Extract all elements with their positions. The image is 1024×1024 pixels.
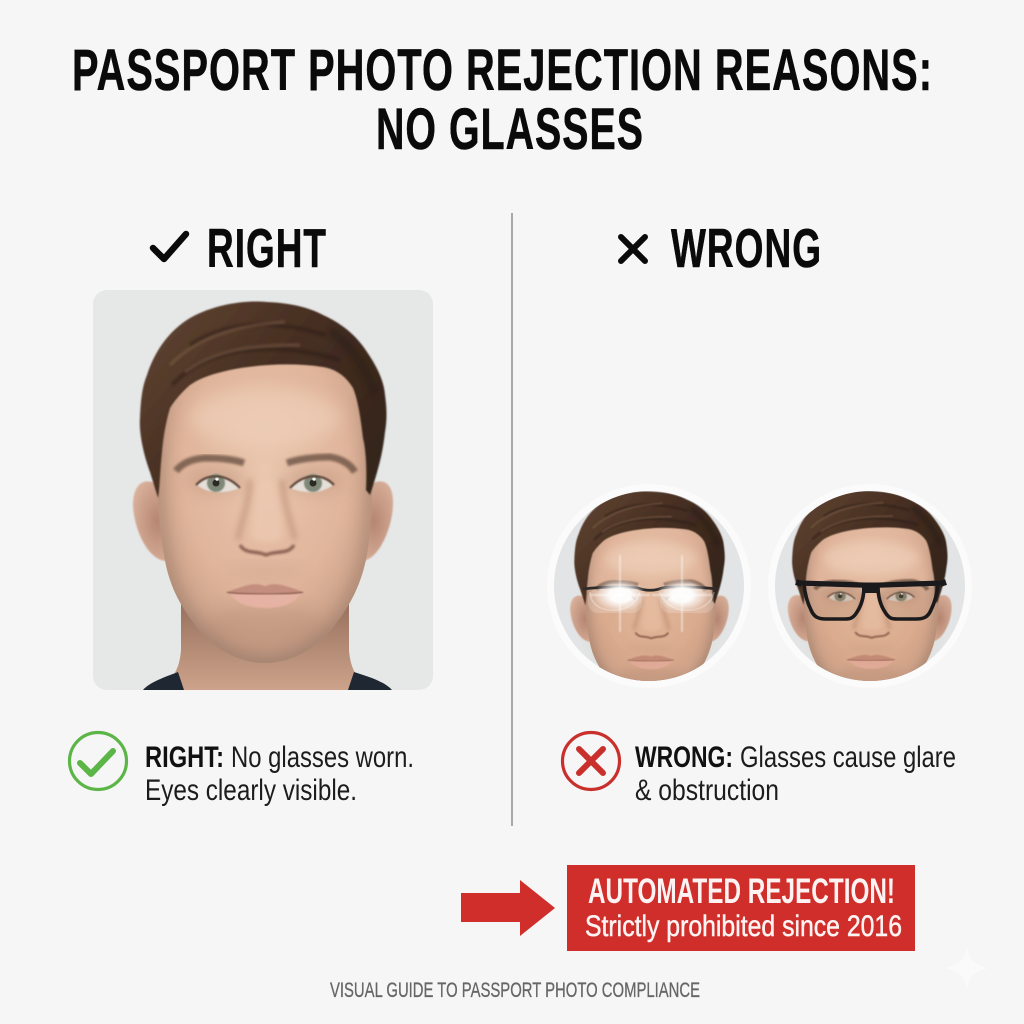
heading: right: RIGHT <box>207 217 327 279</box>
arrow pointing to callout <box>461 880 555 936</box>
caption: wrong: WRONG: <box>635 741 733 774</box>
center divider <box>511 213 513 826</box>
icon: red x circle <box>562 732 620 790</box>
decorative sparkle <box>945 946 989 990</box>
photo circle: thick frame glasses <box>775 491 965 681</box>
footer note: VISUAL GUIDE TO PASSPORT PHOTO COMPLIANCE <box>330 979 700 1002</box>
caption: right: RIGHT: <box>145 741 224 774</box>
caption: right: Eyes clearly visible. <box>145 774 357 807</box>
caption: wrong: & obstruction <box>635 774 779 807</box>
glare highlights <box>590 555 712 632</box>
callout: automated rejection <box>567 865 915 951</box>
caption: right: No glasses worn. <box>231 741 414 774</box>
icon: green check circle <box>70 732 126 790</box>
heading: wrong <box>621 217 822 279</box>
heading: wrong: WRONG <box>671 217 822 279</box>
callout: automated rejection: Strictly prohibited since 2016 <box>585 910 902 943</box>
heading: right <box>153 217 327 279</box>
title <box>72 38 933 162</box>
callout: automated rejection: AUTOMATED REJECTION! <box>588 872 895 911</box>
photo: compliant portrait without glasses <box>93 290 433 700</box>
title: NO GLASSES <box>376 97 644 162</box>
photo circle: glare from thin glasses <box>554 491 744 681</box>
caption: right <box>70 732 414 807</box>
caption: wrong <box>562 732 956 807</box>
caption: wrong: Glasses cause glare <box>740 741 956 774</box>
